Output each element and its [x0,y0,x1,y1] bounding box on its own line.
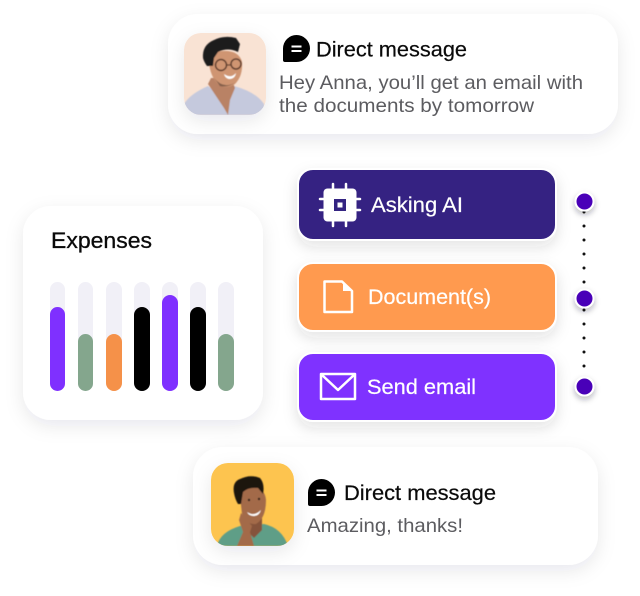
label: send email: Send email [367,376,476,399]
avatar: man with glasses [184,33,266,115]
timeline dots [582,210,586,368]
panel: bottom direct message card [193,447,598,565]
icon: envelope [321,374,355,399]
heading: direct message: Direct message [344,482,496,505]
bar chart [50,282,234,391]
icon: chip [320,184,360,226]
message text [279,72,583,117]
icon detail: document fold [343,282,352,291]
message text: Hey Anna, you’ll get an email with [279,72,583,94]
timeline node 2 [576,290,594,308]
panel: expenses chart [23,206,263,420]
icon: chat bubble [308,479,335,506]
label: asking AI: Asking AI [371,194,463,217]
message text: Amazing, thanks! [307,515,463,537]
timeline node 3 [576,378,594,396]
heading: expenses: Expenses [51,228,152,253]
heading: direct message: Direct message [316,38,467,62]
button: asking AI [298,169,556,240]
message text: the documents by tomorrow [279,95,535,117]
timeline node 1 [576,192,594,210]
button: documents [298,263,556,331]
panel: top direct message card [168,14,618,134]
avatar: smiling man [211,463,294,546]
label: documents: Document(s) [368,286,491,309]
button: send email [298,353,556,421]
icon: chat bubble [283,35,310,62]
icon: document [324,282,352,312]
